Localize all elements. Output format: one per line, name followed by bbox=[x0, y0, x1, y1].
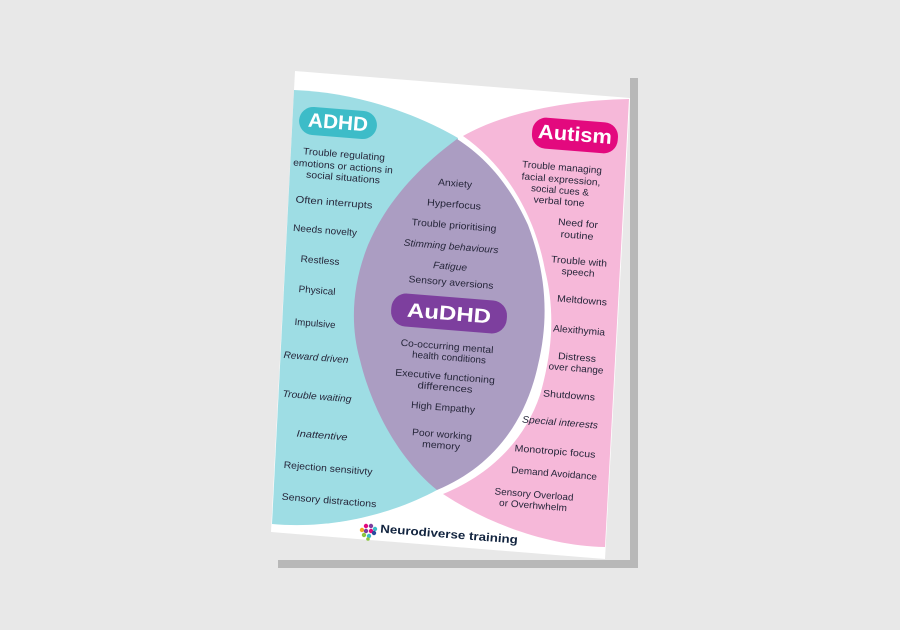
AuDHD traits list: Fatigue bbox=[433, 260, 467, 274]
heading: Autism bbox=[531, 117, 619, 154]
AuDHD traits list: Co-occurring mental bbox=[400, 338, 494, 356]
Autism traits list: routine bbox=[560, 229, 594, 243]
heading: AuDHD: AuDHD bbox=[406, 300, 492, 328]
ADHD traits list: Rejection sensitivty bbox=[283, 460, 373, 478]
AuDHD traits list bbox=[395, 177, 499, 453]
Autism traits list bbox=[494, 159, 608, 514]
ADHD traits list: Often interrupts bbox=[295, 194, 373, 212]
AuDHD traits list: Poor working bbox=[412, 427, 472, 443]
ADHD traits list: Needs novelty bbox=[293, 223, 358, 239]
panel: AuDHD overlap bbox=[354, 139, 545, 490]
ADHD traits list: Reward driven bbox=[283, 350, 349, 366]
AuDHD traits list: memory bbox=[422, 439, 461, 453]
AuDHD traits list: Trouble prioritising bbox=[411, 217, 497, 235]
Autism traits list: facial expression, bbox=[521, 171, 601, 189]
Autism traits list: Monotropic focus bbox=[514, 443, 596, 461]
ADHD traits list: emotions or actions in bbox=[293, 158, 393, 176]
heading: ADHD bbox=[298, 106, 378, 140]
Autism traits list: or Overhwhelm bbox=[499, 498, 567, 514]
Autism traits list: Demand Avoidance bbox=[511, 465, 597, 483]
ADHD traits list: Restless bbox=[300, 254, 340, 268]
ADHD traits list: Trouble regulating bbox=[303, 146, 385, 164]
heading: AuDHD bbox=[390, 292, 508, 335]
AuDHD traits list: High Empathy bbox=[411, 400, 476, 416]
logo wordmark: Neurodiverse training bbox=[380, 523, 518, 547]
Autism traits list: Distress bbox=[558, 351, 597, 365]
panel: ADHD circle bbox=[272, 90, 458, 525]
Autism traits list: Sensory Overload bbox=[494, 486, 574, 504]
ADHD traits list: Sensory distractions bbox=[281, 492, 377, 510]
AuDHD traits list: Executive functioning bbox=[395, 368, 495, 386]
Autism traits list: Special interests bbox=[522, 414, 599, 432]
page shadow bbox=[278, 78, 638, 568]
ADHD traits list: social situations bbox=[306, 170, 381, 186]
AuDHD traits list: differences bbox=[417, 380, 473, 396]
AuDHD traits list: Hyperfocus bbox=[427, 197, 482, 213]
Autism traits list: Alexithymia bbox=[553, 323, 606, 339]
ADHD traits list: Trouble waiting bbox=[282, 389, 353, 405]
AuDHD traits list: health conditions bbox=[412, 350, 487, 366]
Autism traits list: verbal tone bbox=[533, 194, 585, 210]
Autism traits list: Need for bbox=[558, 217, 599, 231]
Autism traits list: Trouble managing bbox=[522, 159, 602, 177]
AuDHD traits list: Stimming behaviours bbox=[403, 238, 499, 256]
heading: ADHD: ADHD bbox=[307, 110, 369, 136]
Autism traits list: Shutdowns bbox=[543, 388, 596, 404]
Autism traits list: speech bbox=[561, 266, 595, 280]
ADHD traits list bbox=[281, 146, 393, 510]
AuDHD traits list: Sensory aversions bbox=[408, 274, 494, 292]
Autism traits list: Trouble with bbox=[551, 254, 607, 270]
ADHD traits list: Physical bbox=[298, 284, 336, 298]
AuDHD traits list: Anxiety bbox=[438, 177, 473, 191]
poster sheet bbox=[271, 71, 630, 559]
heading: Autism: Autism bbox=[537, 121, 613, 149]
Autism traits list: social cues & bbox=[531, 183, 590, 199]
ADHD traits list: Inattentive bbox=[296, 428, 348, 444]
Autism traits list: over change bbox=[548, 361, 604, 377]
Autism traits list: Meltdowns bbox=[557, 294, 608, 309]
panel: Autism circle bbox=[443, 99, 629, 547]
icon: logo brain dots bbox=[360, 524, 377, 541]
ADHD traits list: Impulsive bbox=[294, 317, 336, 331]
